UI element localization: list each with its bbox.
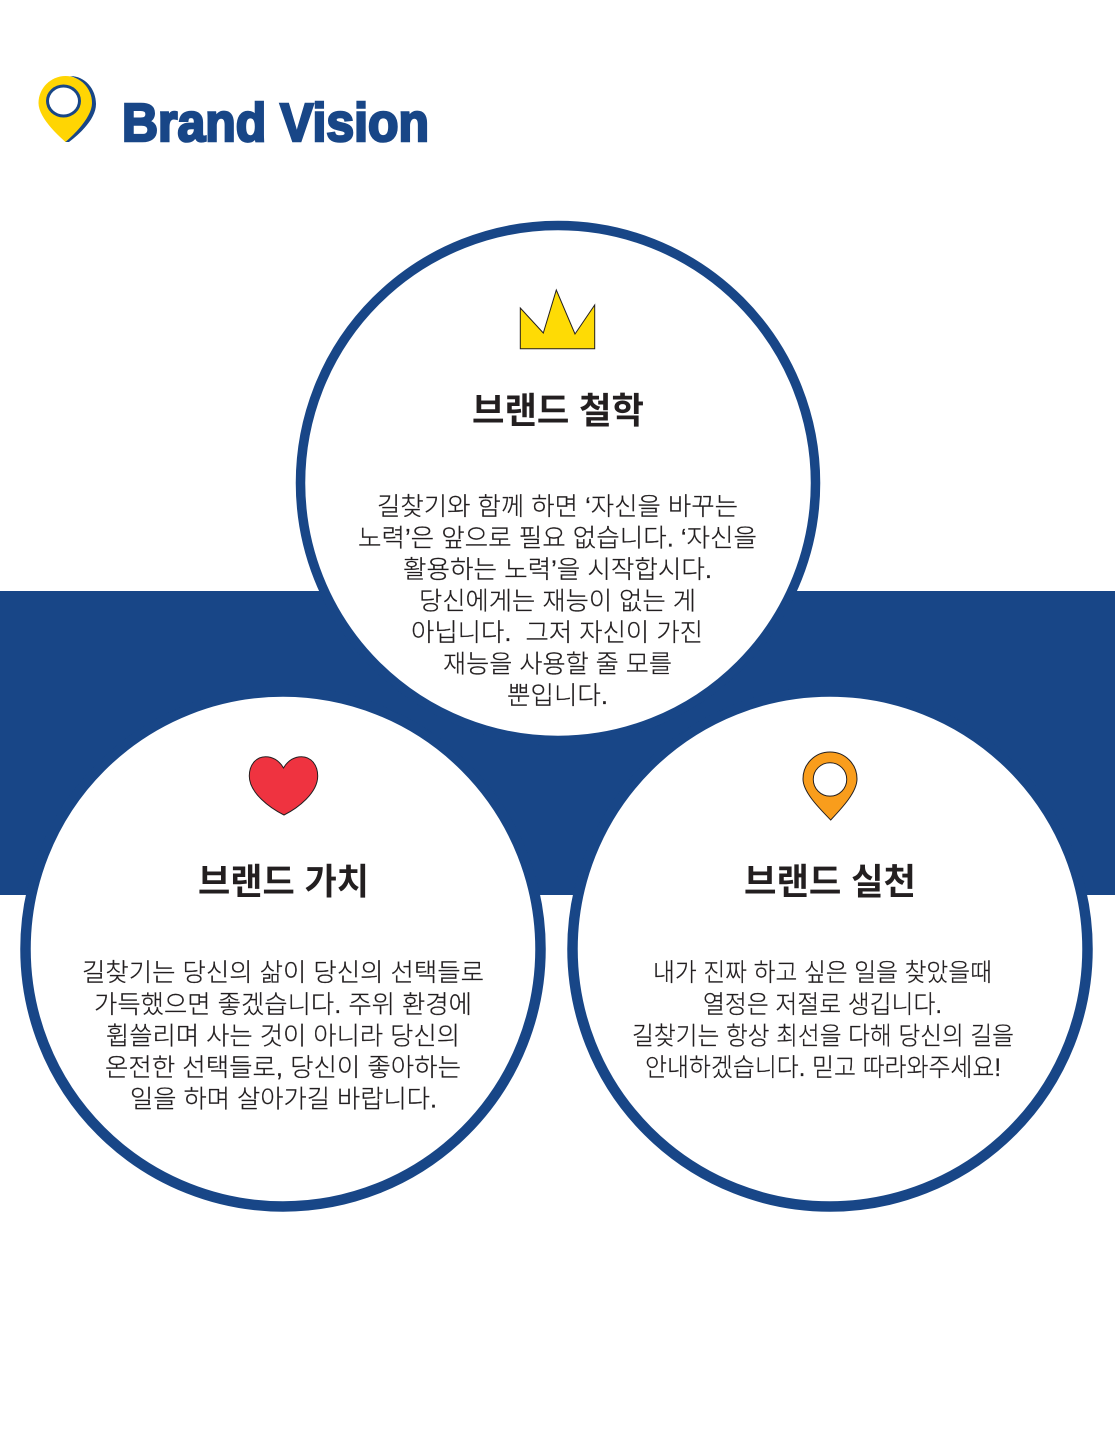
- panel: brand value: [26, 692, 540, 1206]
- text: brand value: [82, 959, 484, 1114]
- text: brand value: 길찾기는 당신의 삶이 당신의 선택들로: [82, 959, 484, 987]
- text: brand philosophy: 재능을 사용할 줄 모를: [443, 650, 672, 678]
- brand logo: [38, 76, 429, 153]
- heading: brand philosophy: 브랜드 철학: [472, 390, 644, 431]
- heading: brand practice: 브랜드 실천: [744, 861, 916, 902]
- logo title: Brand Vision: [122, 93, 429, 153]
- text: brand philosophy: 뿐입니다.: [507, 682, 608, 710]
- text: brand value: 가득했으면 좋겠습니다. 주위 환경에: [94, 991, 472, 1019]
- text: brand practice: 안내하겠습니다. 믿고 따라와주세요!: [645, 1054, 1001, 1082]
- text: brand philosophy: 아닙니다. 그저 자신이 가진: [411, 619, 703, 647]
- text: brand value: 온전한 선택들로, 당신이 좋아하는: [105, 1054, 461, 1082]
- text: brand practice: [632, 959, 1014, 1082]
- panel: brand philosophy: [300, 226, 816, 740]
- text: brand philosophy: 길찾기와 함께 하면 ‘자신을 바꾸는: [377, 493, 738, 521]
- panel: brand practice: [572, 692, 1088, 1206]
- heading: brand value: 브랜드 가치: [198, 861, 369, 902]
- icon: crown: [520, 290, 595, 349]
- text: brand value: 휩쓸리며 사는 것이 아니라 당신의: [106, 1022, 460, 1050]
- icon: logo pin: [38, 76, 96, 142]
- text: brand practice: 열정은 저절로 생깁니다.: [703, 991, 942, 1019]
- text: brand philosophy: 노력’은 앞으로 필요 없습니다. ‘자신을: [358, 524, 757, 552]
- text: brand value: 일을 하며 살아가길 바랍니다.: [130, 1086, 437, 1114]
- text: brand philosophy: [358, 493, 757, 710]
- icon: heart: [249, 757, 318, 815]
- icon: location pin: [803, 752, 857, 820]
- text: brand practice: 길찾기는 항상 최선을 다해 당신의 길을: [632, 1022, 1014, 1050]
- background band: [0, 591, 1115, 895]
- text: brand philosophy: 당신에게는 재능이 없는 게: [419, 588, 696, 616]
- text: brand philosophy: 활용하는 노력’을 시작합시다.: [403, 556, 712, 584]
- text: brand practice: 내가 진짜 하고 싶은 일을 찾았을때: [653, 959, 992, 987]
